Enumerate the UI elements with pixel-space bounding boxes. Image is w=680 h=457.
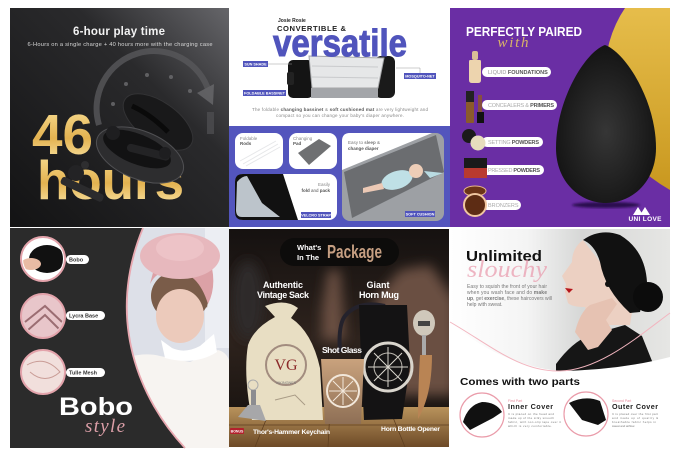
table: wood bbox=[229, 407, 449, 447]
illustration: beauty sponge bbox=[556, 45, 656, 203]
card: fold and pack bbox=[235, 174, 337, 220]
body text: slouchy description bbox=[467, 284, 552, 308]
callout: Bobo: Bobo bbox=[69, 258, 84, 264]
part: outer cover bbox=[564, 392, 658, 436]
item: bronzers bbox=[464, 186, 521, 216]
part: outer cover: It is placed over the first part bbox=[612, 412, 658, 416]
heading: comes with two parts: Comes with two parts bbox=[460, 377, 580, 388]
part: inner cover bbox=[460, 393, 561, 437]
illustration: bag with bassinet bbox=[287, 56, 395, 98]
label: sun shade: SUN SHADE bbox=[244, 62, 267, 66]
card: changing pad bbox=[289, 133, 337, 169]
card: fold and pack: Easily bbox=[318, 182, 331, 187]
item: setting powders: SETTING POWDERS bbox=[488, 140, 539, 146]
label: giant horn mug: Giant bbox=[366, 280, 390, 290]
background: mountains bbox=[232, 260, 455, 395]
shape: gold area bbox=[604, 8, 670, 190]
card: sleep and change: change diaper bbox=[348, 146, 379, 151]
label: sun shade bbox=[243, 61, 292, 67]
card: sleep and change: SOFT CUSHION bbox=[406, 212, 435, 216]
part: outer cover: Second Part bbox=[612, 399, 631, 403]
part: inner cover: Inner Cover bbox=[508, 402, 553, 411]
illustration: open charging case bbox=[88, 83, 202, 194]
label: Thor's-Hammer Keychain: Thor's-Hammer Keychain bbox=[253, 429, 330, 436]
panel: convertible and versatile bag bbox=[229, 8, 450, 227]
big word: hours: hours bbox=[37, 149, 184, 211]
script: slouchy: slouchy bbox=[467, 257, 547, 283]
panel: perfectly paired sponge bbox=[450, 8, 670, 227]
label: foldable bassinet bbox=[243, 90, 286, 96]
part: outer cover: sweat and airflow. bbox=[612, 424, 635, 428]
item: liquid foundations bbox=[469, 51, 551, 83]
part: outer cover: breathable fabric helps in bbox=[612, 420, 656, 424]
description: bassinet text bbox=[252, 107, 428, 118]
band: purple features bbox=[229, 126, 450, 227]
label: authentic vintage sack: Vintage Sack bbox=[257, 290, 310, 300]
callout: Lycra Base: Lycra Base bbox=[69, 314, 98, 320]
illustration: horn mug bbox=[340, 304, 412, 420]
shape: pink curve bbox=[127, 228, 185, 448]
heading: 6-hour play time: 6-hour play time bbox=[73, 26, 165, 38]
big number: 46: 46 bbox=[32, 103, 93, 167]
label: mosquito net: MOSQUITO-NET bbox=[405, 74, 435, 78]
body text: slouchy description: Easy to squish the front of your hair bbox=[467, 284, 547, 290]
body text: slouchy description: up, get exercise, these haircovers will bbox=[467, 296, 552, 302]
illustration: Thor's hammer keychain bbox=[238, 380, 266, 421]
callout: Bobo bbox=[21, 237, 89, 281]
illustration: bottle opener bbox=[413, 310, 435, 419]
heading: perfectly paired: PERFECTLY PAIRED bbox=[466, 24, 582, 39]
card: sleep and change bbox=[342, 133, 444, 221]
part: outer cover: Outer Cover bbox=[612, 402, 658, 411]
callout: Lycra Base bbox=[21, 294, 105, 338]
card: sleep and change: Easy to sleep & bbox=[348, 140, 380, 145]
card: foldable rods bbox=[235, 133, 283, 169]
icon: clock arrow bbox=[97, 51, 214, 134]
body text: slouchy description: when you wash face and do make bbox=[467, 290, 547, 296]
illustration: loose earbud bbox=[60, 161, 105, 203]
label: bonus bbox=[230, 428, 244, 434]
callout: Tulle Mesh: Tulle Mesh bbox=[69, 370, 98, 376]
logo: Uni Love: UNI LOVE bbox=[628, 216, 662, 223]
card: fold and pack: VELCRO STRAP bbox=[301, 214, 331, 218]
item: setting powders bbox=[462, 129, 543, 150]
item: bronzers: BRONZERS bbox=[488, 203, 519, 209]
heading: versatile: versatile bbox=[273, 23, 407, 65]
illustration: shot glass bbox=[321, 359, 364, 424]
card: fold and pack: fold and pack bbox=[301, 188, 330, 193]
card: foldable rods: Foldable bbox=[240, 136, 258, 141]
card: changing pad: Pad bbox=[293, 141, 302, 146]
description: bassinet text: compact so you can change your baby's diaper anywhere. bbox=[276, 113, 404, 118]
label: Horn Bottle Opener: Horn Bottle Opener bbox=[381, 426, 440, 433]
part: inner cover: fabric, with non-slip tape over it bbox=[508, 420, 561, 424]
card: foldable rods: Rods bbox=[240, 141, 252, 146]
card: changing pad: Changing bbox=[293, 136, 313, 141]
illustration: sack: VIKINGNES bbox=[276, 381, 297, 385]
panel: Bobo style turban bbox=[10, 228, 230, 448]
brand: Josie Rosie: Josie Rosie bbox=[278, 18, 306, 24]
part: inner cover: It is placed on the head and bbox=[508, 412, 554, 416]
script: with: with bbox=[498, 35, 528, 51]
subheading: battery detail: 6-Hours on a single charge + 40 hours more with the charging case bbox=[28, 42, 212, 48]
pill: what's in the package bbox=[280, 238, 399, 266]
part: inner cover: First Part bbox=[508, 399, 522, 403]
figure: woman bbox=[556, 232, 663, 372]
item: concealers and primers: CONCEALERS & PRIMERS bbox=[488, 103, 554, 109]
item: pressed powders bbox=[464, 158, 544, 178]
item: concealers and primers bbox=[466, 91, 557, 123]
heading: Unlimited: Unlimited bbox=[466, 248, 542, 265]
panel: 6-hour play time earbuds bbox=[10, 8, 229, 227]
label: authentic vintage sack bbox=[257, 280, 310, 300]
logo: Uni Love bbox=[628, 207, 662, 221]
label: mosquito net bbox=[396, 68, 436, 79]
decor: pink curves bbox=[450, 313, 670, 371]
pill: what's in the package: In The bbox=[297, 253, 319, 262]
part: inner cover: which is very comfortable. bbox=[508, 424, 552, 428]
callout: Tulle Mesh bbox=[21, 350, 105, 394]
script: style: style bbox=[85, 416, 125, 437]
illustration: sack bbox=[246, 302, 323, 420]
panel: what's in the package bbox=[229, 229, 455, 447]
panel: unlimited slouchy bbox=[450, 228, 670, 448]
part: outer cover: and made up of quality & bbox=[612, 416, 658, 420]
photo: woman in pink turban bbox=[120, 228, 230, 448]
label: giant horn mug: Horn Mug bbox=[359, 290, 399, 300]
label: bonus: BONUS bbox=[231, 430, 244, 434]
label: authentic vintage sack: Authentic bbox=[263, 280, 303, 290]
title: Bobo: Bobo bbox=[59, 393, 133, 421]
part: inner cover: made up of the silky smooth bbox=[508, 416, 554, 420]
pill: what's in the package: What's bbox=[297, 243, 321, 252]
description: bassinet text: The foldable changing bassinet & soft cushioned mat are very lightweight and bbox=[252, 107, 428, 112]
illustration: sack: VG bbox=[274, 357, 298, 374]
body text: slouchy description: help with sweat. bbox=[467, 302, 503, 308]
item: liquid foundations: LIQUID FOUNDATIONS bbox=[488, 70, 548, 76]
label: foldable bassinet: FOLDABLE BASSINET bbox=[244, 92, 286, 96]
heading: convertible: CONVERTIBLE & bbox=[277, 24, 347, 33]
pill: what's in the package: Package bbox=[327, 242, 382, 262]
label: giant horn mug bbox=[359, 280, 399, 300]
item: pressed powders: PRESSED POWDERS bbox=[488, 168, 540, 174]
shadow: sponge bbox=[572, 202, 640, 208]
label: shot glass: Shot Glass bbox=[322, 345, 362, 355]
illustration: baby doll bbox=[363, 164, 443, 194]
photo: woman in black hair cover bbox=[507, 229, 670, 371]
